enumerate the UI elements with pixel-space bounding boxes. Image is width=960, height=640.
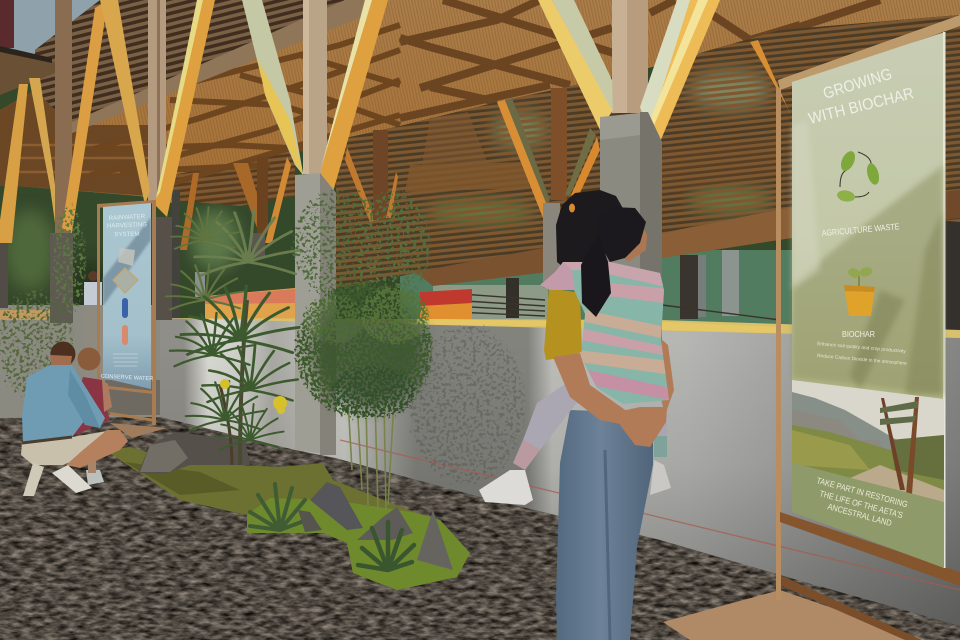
child near shoe: [479, 470, 533, 505]
background timber columns and braces: [172, 40, 792, 320]
upper sparse leaves: [295, 190, 433, 300]
icon: filter diamond: [113, 268, 138, 293]
photo: Aeta ancestral land: [790, 375, 946, 505]
call-to-action panel: [792, 463, 944, 568]
child arm hugging: [540, 262, 575, 290]
sunlit strip: [792, 122, 820, 290]
sign base board: [663, 590, 925, 640]
child face: [620, 215, 647, 262]
child: [72, 348, 112, 485]
distant bench and visitor: [84, 271, 472, 320]
mother yellow shirt: [544, 288, 582, 360]
coffered timber ceiling: [0, 0, 960, 206]
icon: catchment roof: [118, 248, 135, 266]
left timber columns: [0, 0, 172, 323]
sign base diagonal rail: [780, 575, 922, 640]
sign title line 1: GROWING: [821, 66, 894, 103]
branch shadow on panel: [792, 165, 943, 395]
rocks behind moss: [138, 432, 250, 474]
background forest: [0, 0, 960, 330]
sign shadow band: [103, 217, 151, 306]
biochar benefit 2: Reduce Carbon Dioxide in the atmosphere: [817, 353, 907, 367]
sign title line 2: HARVESTING: [107, 221, 147, 230]
plant 1: [250, 484, 312, 530]
sign footer: CONSERVE WATER: [101, 374, 153, 382]
bamboo foliage underlay: [313, 292, 423, 408]
left shrub: [0, 205, 88, 400]
front column one: [242, 0, 388, 455]
rock 5: [298, 510, 322, 532]
timber platform near kneeling man: [110, 423, 167, 438]
mother arm and hands: [553, 338, 674, 447]
left upper slatted storey: [0, 0, 345, 140]
concrete boundary wall: [160, 318, 960, 640]
ground level left backdrop: [0, 305, 160, 430]
yellow flowers: [220, 379, 287, 414]
rock 2: [310, 482, 363, 530]
call to action line 2: THE LIFE OF THE AETA'S: [818, 488, 904, 520]
icon: orange container: [122, 325, 128, 345]
hair tie: [569, 204, 575, 212]
call to action line 1: TAKE PART IN RESTORING: [815, 475, 909, 509]
moss beds: [105, 447, 470, 590]
sign bottom rail: [780, 512, 960, 586]
plant 2: [358, 522, 414, 570]
icon: recycling leaves: [836, 149, 881, 203]
Y-shaped timber braces left: [0, 0, 215, 243]
mother jeans: [556, 410, 653, 640]
sign frame: [97, 200, 156, 425]
icon: seedling in pot: [844, 266, 875, 316]
bamboo stems: [348, 400, 394, 510]
sign title line 3: SYSTEM: [114, 231, 140, 238]
signpost: [880, 397, 919, 494]
child far shoe: [650, 460, 671, 495]
yellow floor ledge: [172, 318, 960, 340]
bamboo foliage: [295, 190, 433, 418]
sign body text: [113, 354, 138, 366]
icon: blue tank: [122, 298, 128, 318]
sign panel: [103, 203, 151, 389]
sign posts and top rail: [776, 15, 960, 600]
sign white edge: [943, 32, 946, 568]
child sock: [513, 440, 540, 470]
far green field and posts under the deck: [400, 218, 960, 330]
mother and child: [479, 190, 680, 640]
rainwater sign: [97, 200, 156, 425]
tree shadow on wall: [412, 327, 528, 483]
gravel ground: [0, 410, 960, 640]
child striped shirt: [562, 262, 669, 404]
man: [21, 342, 128, 496]
dense lower leaves: [297, 282, 433, 418]
rock 3: [357, 507, 413, 540]
palm plant: [166, 207, 301, 465]
label biochar: BIOCHAR: [842, 329, 875, 339]
child far leg: [655, 407, 667, 455]
slatted back wall: [336, 15, 960, 290]
biochar benefit 1: Enhance soil quality and crop productivity: [817, 341, 907, 355]
child near leg: [523, 383, 585, 450]
kneeling man and child: [21, 342, 128, 496]
call to action line 3: ANCESTRAL LAND: [826, 501, 893, 528]
rock 4: [417, 510, 453, 570]
sign title line 2: WITH BIOCHAR: [807, 85, 916, 128]
child ponytail: [581, 233, 611, 317]
mother hair: [556, 190, 625, 266]
wooden deck edge bands: [415, 190, 960, 286]
front rocks and plants: [250, 482, 453, 570]
child hair: [597, 207, 646, 262]
label agriculture waste: AGRICULTURE WASTE: [821, 221, 900, 238]
front column two with Y brace: [538, 0, 720, 340]
sign title: RAINWATER: [109, 213, 146, 222]
sign panel: [792, 32, 945, 400]
biochar sign: [663, 15, 960, 640]
